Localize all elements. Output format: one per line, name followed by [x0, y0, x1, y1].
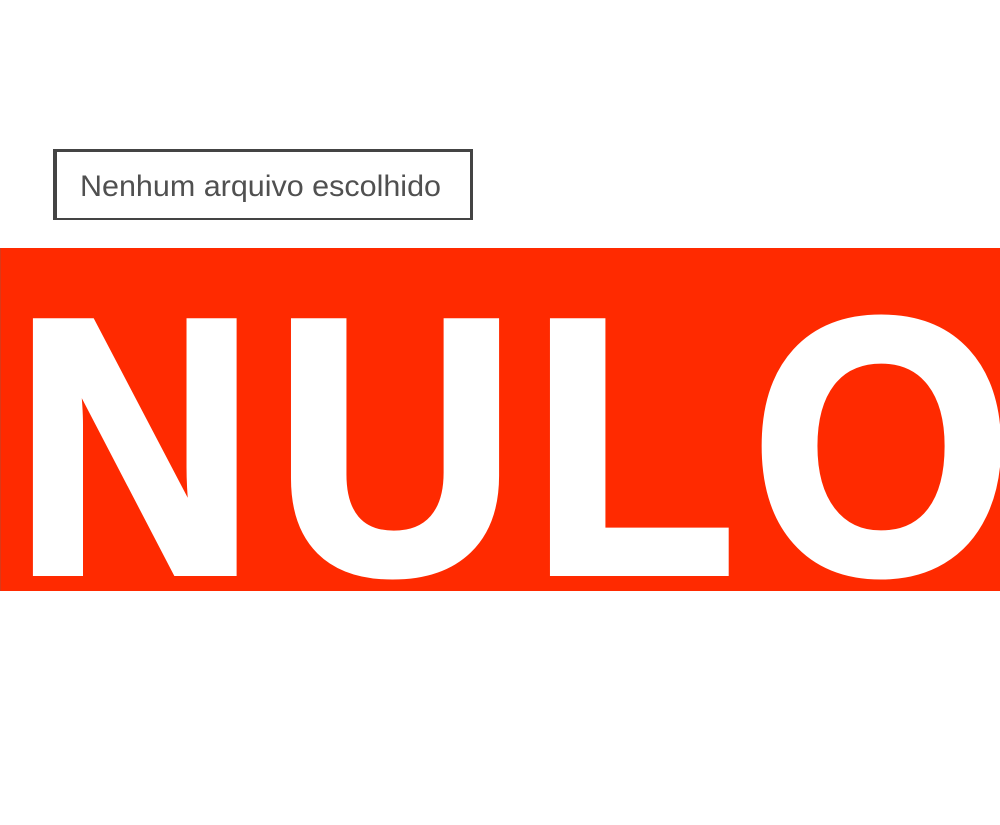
- file input label: Nenhum arquivo escolhido: [80, 170, 441, 203]
- banner word NULO: NULO: [14, 243, 1000, 649]
- file input box: [53, 149, 473, 220]
